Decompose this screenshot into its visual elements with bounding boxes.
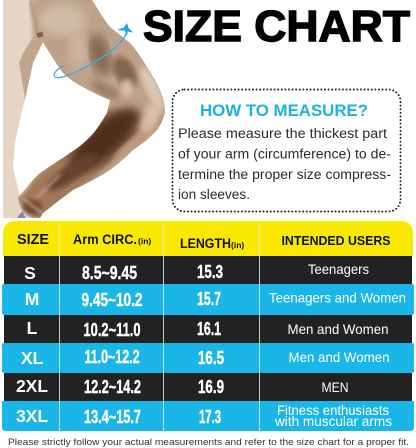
row: 3XL: 13.4~15.7 bbox=[84, 407, 141, 427]
title: SIZE CHART bbox=[143, 2, 410, 51]
row: 2XL: MEN bbox=[322, 379, 348, 395]
row: S: S bbox=[24, 263, 36, 283]
row: XL bbox=[2, 343, 414, 373]
row: 3XL: 3XL bbox=[16, 406, 48, 426]
row: M: 9.45~10.2 bbox=[82, 290, 142, 310]
row: M: M bbox=[25, 289, 39, 309]
text block: measuring instructions: Please measure the thickest part bbox=[178, 126, 387, 142]
row: 3XL: 17.3 bbox=[199, 407, 221, 427]
row: 2XL: 12.2~14.2 bbox=[84, 377, 141, 397]
table header row bbox=[3, 221, 413, 256]
row: XL: Men and Women bbox=[288, 349, 390, 365]
row: 3XL: Fitness enthusiasts bbox=[277, 402, 389, 418]
row: XL: XL bbox=[21, 348, 43, 368]
table header row: Arm CIRC. bbox=[73, 232, 137, 247]
text block: measuring instructions bbox=[178, 126, 391, 203]
row: S: Teenagers bbox=[308, 261, 369, 277]
table: size chart bbox=[2, 221, 414, 431]
footnote: Please strictly follow your actual measurements and refer to the size chart for a proper fit. bbox=[8, 437, 409, 448]
row: 3XL bbox=[2, 401, 414, 431]
row: L: L bbox=[27, 318, 38, 338]
row: M bbox=[2, 284, 414, 315]
row: M: Teenagers and Women bbox=[269, 290, 406, 306]
row: XL: 11.0~12.2 bbox=[84, 347, 140, 367]
wrist band bbox=[17, 211, 26, 218]
row: XL: 16.5 bbox=[198, 348, 224, 368]
row: L: 16.1 bbox=[197, 319, 221, 339]
text block: measuring instructions: termine the proper size compress- bbox=[178, 167, 391, 183]
table header row: LENGTH bbox=[180, 236, 231, 251]
table header row: (in) bbox=[138, 236, 151, 246]
row: S bbox=[4, 256, 412, 284]
row: S: 15.3 bbox=[197, 262, 223, 282]
forearm shading bbox=[14, 110, 168, 222]
table header row: INTENDED USERS bbox=[282, 234, 390, 248]
icon: measuring loop around upper arm bbox=[54, 24, 132, 78]
heading: how to measure: HOW TO MEASURE? bbox=[200, 102, 368, 120]
row: L bbox=[4, 315, 412, 343]
row: 2XL bbox=[4, 373, 412, 401]
text block: measuring instructions: of your arm (circumference) to de- bbox=[178, 146, 391, 162]
row: 3XL: with muscular arms bbox=[274, 413, 392, 429]
upper arm and forearm bbox=[18, 0, 165, 218]
photo: flexed arm bbox=[0, 0, 170, 222]
torso bbox=[3, 0, 40, 218]
row: L: 10.2~11.0 bbox=[84, 320, 140, 340]
row: 2XL: 2XL bbox=[16, 376, 48, 396]
table header row: (in) bbox=[231, 240, 244, 250]
panel: how to measure bbox=[172, 90, 400, 212]
text block: measuring instructions: ion sleeves. bbox=[178, 187, 250, 203]
table header row: SIZE bbox=[17, 232, 49, 248]
row: M: 15.7 bbox=[197, 289, 221, 309]
row: 2XL: 16.9 bbox=[198, 377, 224, 397]
row: L: Men and Women bbox=[288, 321, 388, 337]
row: S: 8.5~9.45 bbox=[82, 263, 137, 283]
